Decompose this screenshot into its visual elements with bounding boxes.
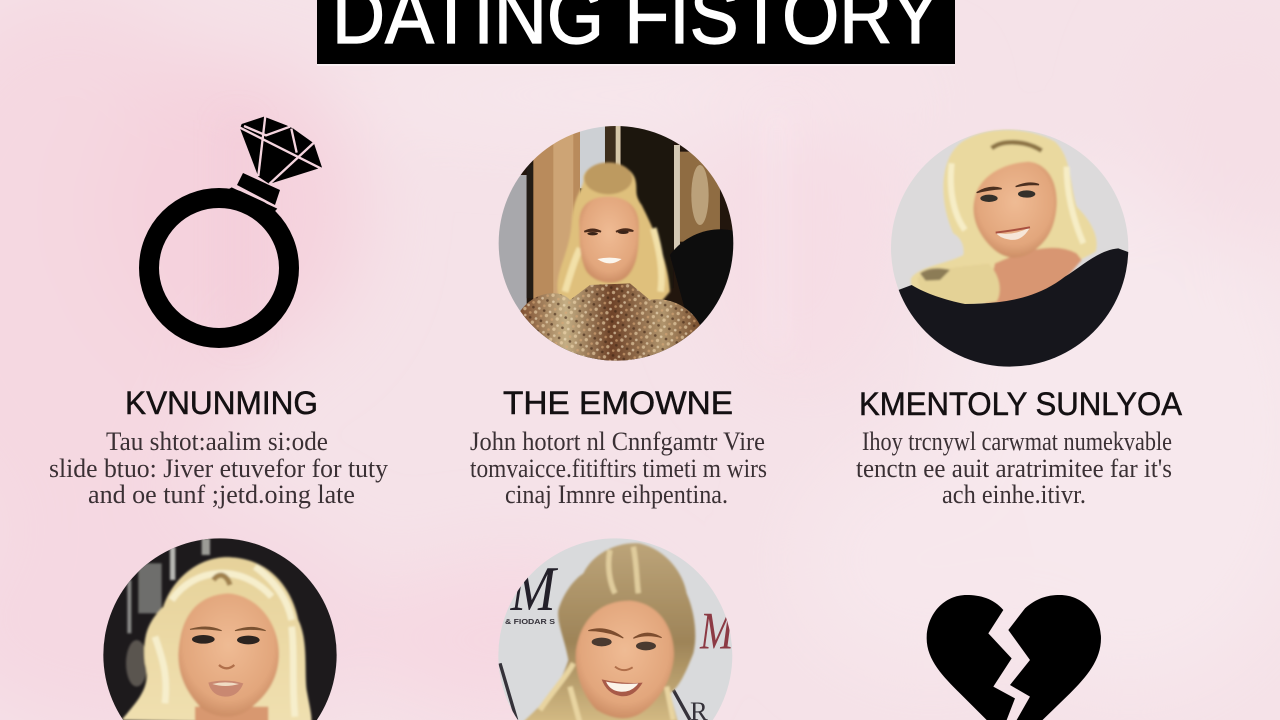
title banner (317, 0, 955, 66)
panel: the emowne (470, 115, 767, 509)
photo: woman with platinum blonde hair on dark background (103, 538, 337, 720)
photo: woman smiling in front of press backdrop (498, 538, 735, 720)
body text: slide btuo: Jiver etuvefor for tuty (49, 454, 388, 483)
body text: tenctn ee auit aratrimitee far it's (856, 454, 1172, 483)
body text: Tau shtot:aalim si:ode (106, 427, 328, 456)
icon: diamond ring (149, 116, 322, 338)
panel: platinum blonde portrait (103, 538, 337, 720)
body text (470, 427, 767, 509)
panel: kmentoly sunlyoa (856, 129, 1183, 509)
body text: tomvaicce.fitiftirs timeti m wirs (470, 454, 767, 483)
panel: engagement (49, 116, 388, 509)
body text: Ihoy trcnywl carwmat numekvable (862, 427, 1172, 456)
panel: smiling blonde portrait (498, 538, 735, 720)
heading: THE EMOWNE (503, 385, 733, 421)
photo: blonde woman in black sweater (891, 129, 1132, 377)
body text: cinaj Imnre eihpentina. (505, 480, 728, 509)
photo: woman smiling in front of press backdrop: M (699, 600, 735, 660)
body text (856, 427, 1172, 509)
heading: KMENTOLY SUNLYOA (859, 386, 1183, 422)
heading: KVNUNMING (125, 385, 318, 421)
photo: woman smiling in front of press backdrop: & FIODAR S (505, 617, 555, 626)
body text (49, 427, 388, 509)
icon: broken heart (927, 595, 1101, 720)
photo: woman in gold sequin dress (498, 126, 734, 361)
photo: woman smiling in front of press backdrop: M (510, 554, 558, 624)
body text: John hotort nl Cnnfgamtr Vire (470, 427, 765, 456)
body text: and oe tunf ;jetd.oing late (88, 480, 355, 509)
body text: ach einhe.itivr. (942, 480, 1086, 509)
